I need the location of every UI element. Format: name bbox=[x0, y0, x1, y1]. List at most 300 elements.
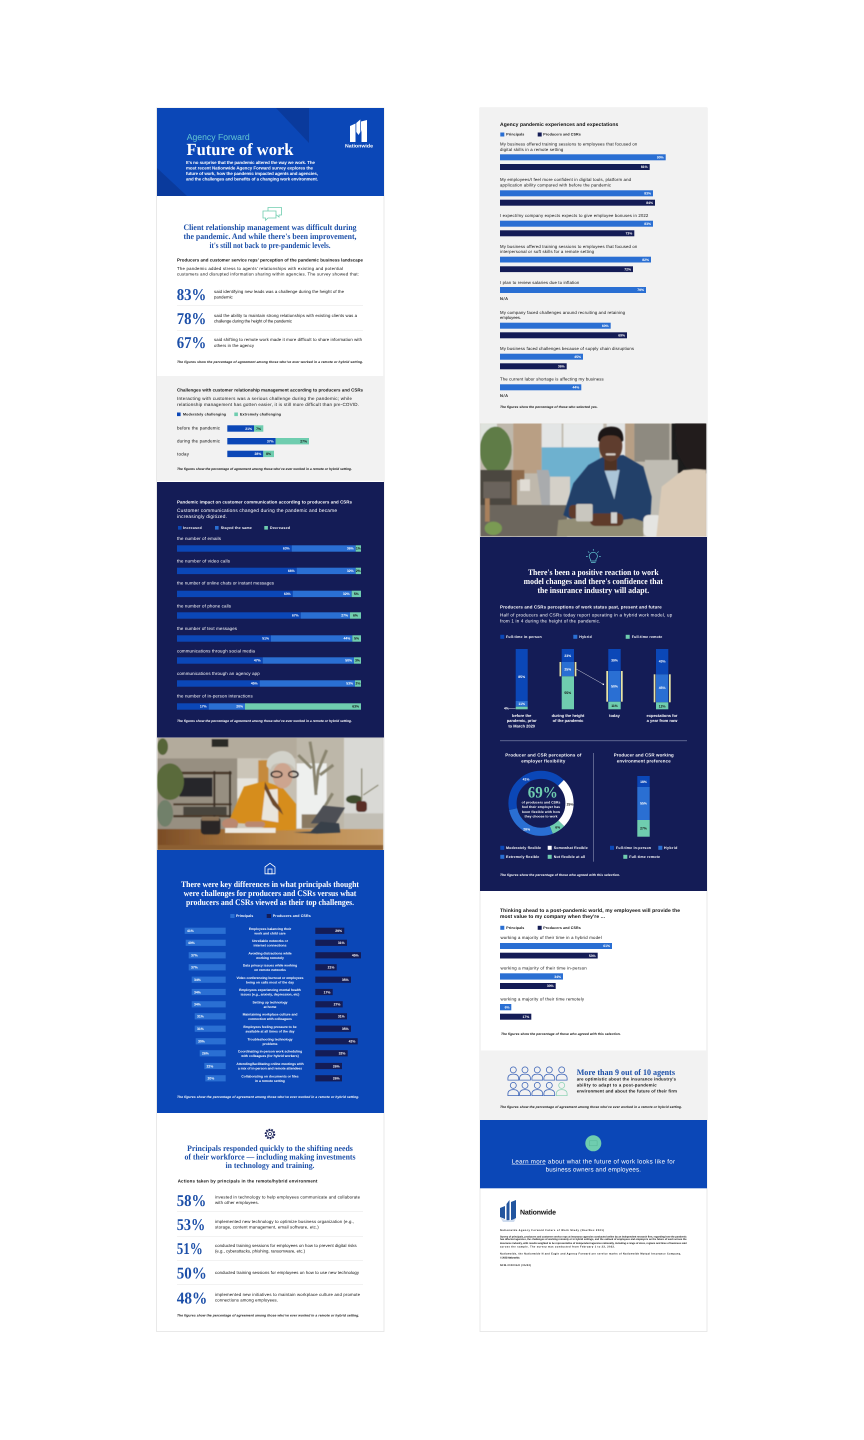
column: before the pandemic: 11% bbox=[518, 702, 525, 706]
heading: the insurance industry will adapt. bbox=[537, 585, 649, 595]
row: being on calls most of the day bbox=[246, 980, 294, 984]
call to action bbox=[512, 1158, 675, 1174]
bar: online chats: 32% bbox=[343, 592, 350, 596]
bar group: training interpersonal: 82% bbox=[642, 258, 649, 262]
column: today: 11% bbox=[611, 704, 618, 708]
subheading: Actions taken by principals in the remote/hybrid environment bbox=[178, 1178, 318, 1184]
bar: today: 28% bbox=[255, 452, 261, 456]
row: 30% bbox=[198, 1040, 205, 1044]
row: 34% bbox=[194, 990, 201, 994]
column: during the height of the pandemic: 25% bbox=[564, 668, 571, 672]
row bbox=[192, 976, 351, 984]
logo: Nationwide: Nationwide bbox=[520, 1208, 556, 1216]
row: in a remote setting bbox=[255, 1079, 285, 1083]
bar group: remotely: 6% bbox=[505, 1006, 510, 1010]
panel: challenges with customer relationship management bbox=[157, 376, 384, 481]
footnote: The figures show the percentage of those who selected yes. bbox=[500, 405, 598, 409]
bar: phone calls: 67% bbox=[292, 614, 299, 618]
row: Avoiding distractions while bbox=[248, 952, 292, 956]
bar: online chats: the number of online chats or instant messages bbox=[177, 580, 275, 586]
logo: Nationwide bbox=[345, 120, 373, 150]
bar group: recruiting: employees. bbox=[500, 315, 521, 320]
bar group: confident digital tools: 83% bbox=[644, 192, 651, 196]
row: 26% bbox=[202, 1052, 209, 1056]
chart: employer flexibility donut: they choose to work bbox=[524, 814, 558, 818]
stat: 50%: conducted training sessions for employees on how to use new technology bbox=[215, 1270, 360, 1275]
stat: 53%: storage, content management, email software, etc.) bbox=[215, 1224, 319, 1230]
row: 34% bbox=[194, 978, 201, 982]
legend: Producers and CSRs bbox=[543, 132, 581, 136]
bar: during the pandemic: 37% bbox=[267, 440, 274, 444]
stat: 50% bbox=[177, 1263, 360, 1282]
footnote: The figures show the percentage of agreement among those who've ever worked in a remote or hybrid setting. bbox=[177, 1313, 359, 1317]
stat: 83%: pandemic bbox=[214, 294, 234, 300]
arrow: hybrid increase bbox=[576, 669, 604, 685]
source notes: Nationwide, the Nationwide N and Eagle and Agency Forward are service marks of Nationwide Mutual Insurance Company, bbox=[500, 1252, 681, 1256]
column: before the pandemic: before the bbox=[512, 713, 532, 718]
legend: Full-time remote bbox=[632, 635, 662, 639]
column: expectations for a year from now: 12% bbox=[659, 704, 665, 708]
heading bbox=[524, 567, 663, 595]
panel: pandemic impact on customer communication bbox=[157, 482, 384, 738]
bar group: in-person bbox=[500, 966, 587, 989]
heading: were challenges for producers and CSRs versus what bbox=[184, 888, 356, 898]
bar group: salaries: 79% bbox=[637, 288, 644, 292]
stat: 48%: implemented new initiatives to maintain workplace culture and promote bbox=[215, 1292, 361, 1297]
heading bbox=[184, 223, 357, 250]
stat: 53%: 53% bbox=[177, 1215, 205, 1234]
row: 26% bbox=[333, 1077, 340, 1081]
body text: Interacting with customers was a serious challenge during the pandemic; while bbox=[177, 396, 352, 401]
heading bbox=[500, 908, 680, 920]
source notes: NFM-00000AO (05/22) bbox=[500, 1264, 531, 1267]
heading: There's been a positive reaction to work bbox=[528, 567, 659, 577]
body text: The pandemic added stress to agents' relationships with existing and potential bbox=[177, 266, 343, 271]
heading: model changes and there's confidence that bbox=[524, 576, 663, 586]
row: connection with colleagues bbox=[248, 1017, 292, 1021]
callout: More than 9 out of 10 agents bbox=[577, 1067, 676, 1077]
row bbox=[189, 952, 361, 960]
chart: employer flexibility donut: 28% bbox=[523, 828, 530, 832]
column: during the height of the pandemic: during the height bbox=[552, 713, 585, 718]
legend bbox=[500, 926, 581, 930]
callout: environment and about the future of their firm bbox=[577, 1089, 677, 1094]
body text: Customer communications changed during the pandemic and became bbox=[177, 508, 337, 514]
footnote: The figures show the percentage of those who agreed with this selection. bbox=[501, 1032, 621, 1036]
heading bbox=[181, 879, 359, 907]
row bbox=[185, 927, 344, 935]
bar group: bonuses: I expect/my company expects expects to give employee bonuses in 2022 bbox=[500, 213, 649, 218]
body text: Half of producers and CSRs today report operating in a hybrid work model, up bbox=[500, 613, 673, 618]
legend: preference: Hybrid bbox=[664, 846, 677, 850]
legend: flexibility: Extremely flexible bbox=[506, 855, 539, 859]
bar: agency app: 45% bbox=[251, 682, 258, 686]
row: Employees experiencing mental health bbox=[239, 988, 301, 992]
bar group: hybrid bbox=[500, 935, 612, 958]
panel: thinking ahead bbox=[500, 908, 680, 1036]
chart: working environment preference: 18% bbox=[640, 780, 647, 784]
stacked bars: work status bbox=[504, 649, 678, 728]
legend: preference bbox=[610, 846, 677, 859]
bar: phone calls: the number of phone calls bbox=[177, 604, 232, 608]
source notes: © 2022 Nationwide. bbox=[500, 1256, 520, 1260]
heading: Pandemic impact on customer communication according to producers and CSRs bbox=[177, 500, 353, 504]
row: at home bbox=[264, 1005, 277, 1009]
column: before the pandemic bbox=[504, 649, 537, 728]
subheading: Producers and customer service reps' perception of the pandemic business landscape bbox=[177, 258, 364, 262]
legend: Producers and CSRs bbox=[273, 914, 311, 918]
footnote: The figures show the percentage of agreement among those who've ever worked in a remote or hybrid setting. bbox=[177, 360, 363, 364]
icon: light bulb bbox=[586, 549, 601, 562]
chart: employer flexibility donut: of producers and CSRs bbox=[522, 800, 560, 804]
stat: 51%: (e.g., cyberattacks, phishing, ransomware, etc.) bbox=[215, 1248, 306, 1254]
body text bbox=[177, 266, 359, 277]
panel: 9 out of 10 agents bbox=[480, 1050, 707, 1120]
bar: in-person interactions: 17% bbox=[200, 705, 207, 709]
bar: emails: 1% bbox=[356, 547, 361, 551]
legend bbox=[178, 526, 290, 530]
stat: 83%: said identifying new leads was a challenge during the height of the bbox=[214, 289, 345, 294]
bar: today: 8% bbox=[266, 452, 271, 456]
heading: producers and CSRs viewed as their top challenges. bbox=[186, 897, 354, 907]
row bbox=[192, 988, 333, 997]
source notes: across the sample. The survey was conducted from February 1 to 23, 2022. bbox=[500, 1246, 615, 1248]
heading: Thinking ahead to a post-pandemic world, my employees will provide the bbox=[500, 908, 680, 914]
bar: online chats bbox=[177, 580, 361, 597]
bar: video calls: 32% bbox=[347, 569, 354, 573]
heading: in technology and training. bbox=[226, 1161, 314, 1170]
bar: agency app bbox=[177, 671, 361, 687]
legend: flexibility bbox=[500, 846, 588, 859]
legend: preference: Full-time remote bbox=[629, 855, 660, 859]
stat: 53%: implemented new technology to optimize business organization (e.g., bbox=[215, 1219, 354, 1224]
footnote: The figures show the percentage of agreement among those who've ever worked in a remote or hybrid setting. bbox=[177, 467, 352, 471]
panel: footer bbox=[500, 1200, 687, 1267]
bar group: salaries: I plan to review salaries due to inflation bbox=[500, 280, 580, 285]
legend: flexibility: Moderately flexible bbox=[506, 846, 541, 850]
row: 31% bbox=[338, 941, 345, 945]
row bbox=[195, 1025, 351, 1033]
bar group: confident digital tools: application ability compared with before the pandemic bbox=[500, 182, 612, 188]
heading: of their workforce — including making investments bbox=[184, 1152, 356, 1162]
panel: key differences bbox=[157, 850, 384, 1113]
bar: in-person interactions: 20% bbox=[236, 705, 243, 709]
legend bbox=[177, 412, 281, 417]
legend: Stayed the same bbox=[221, 526, 252, 530]
body text: increasingly digitized. bbox=[177, 514, 227, 520]
bar: video calls: 2% bbox=[356, 569, 361, 573]
legend: Increased bbox=[183, 526, 202, 530]
title: Future of work bbox=[186, 140, 294, 159]
bar: text messages: 44% bbox=[344, 637, 350, 641]
chart: working environment preference: 27% bbox=[640, 826, 647, 830]
callout: ability to adapt to a post-pandemic bbox=[577, 1083, 657, 1088]
heading bbox=[184, 1144, 356, 1170]
bar group: hybrid: 61% bbox=[603, 944, 610, 948]
chart: working environment preference bbox=[614, 752, 674, 837]
panel: header bbox=[157, 108, 384, 196]
panel: positive reaction to work model changes bbox=[480, 537, 707, 891]
column: before the pandemic: to March 2020 bbox=[508, 724, 536, 728]
row: 35% bbox=[342, 978, 349, 982]
body text: from 1 in 4 during the height of the pandemic. bbox=[500, 619, 600, 624]
bar group: remotely: working a majority of their time remotely bbox=[500, 996, 585, 1002]
stat: 83% bbox=[177, 285, 345, 304]
bar: agency app: 53% bbox=[346, 682, 353, 686]
row: 41% bbox=[187, 929, 194, 933]
heading: it's still not back to pre-pandemic levels. bbox=[210, 241, 330, 250]
stat: 51%: 51% bbox=[177, 1239, 203, 1258]
row: 37% bbox=[191, 966, 198, 970]
bar group: confident digital tools: My employees/I feel more confident in digital tools, platform and bbox=[500, 177, 632, 182]
bar group: training digital bbox=[500, 142, 666, 170]
row: Coordinating in-person work scheduling bbox=[238, 1050, 302, 1054]
bar: online chats: 63% bbox=[284, 592, 291, 596]
bar: emails: the number of emails bbox=[177, 536, 222, 541]
call to action: business owners and employees. bbox=[546, 1166, 641, 1174]
footnote: The figures show the percentage of those who agreed with this selection. bbox=[500, 873, 620, 877]
bar group: labor shortage: N/A bbox=[500, 393, 508, 398]
footnote: The figures show the percentage of agreement among those who've ever worked in a remote or hybrid setting. bbox=[500, 1105, 682, 1109]
heading: Client relationship management was difficult during bbox=[184, 223, 357, 232]
row: 37% bbox=[191, 954, 198, 958]
column: expectations for a year from now: a year from now bbox=[647, 718, 678, 723]
row: internet connections bbox=[254, 943, 287, 947]
column: expectations for a year from now bbox=[647, 649, 678, 723]
bar: during the pandemic: 27% bbox=[300, 440, 307, 444]
column: today: 39% bbox=[611, 658, 618, 662]
bar: during the pandemic bbox=[177, 438, 309, 444]
body text bbox=[177, 396, 359, 407]
bar: social media: communications through social media bbox=[177, 648, 256, 654]
chart: working environment preference: Producer and CSR working bbox=[614, 752, 674, 758]
legend: Decreased bbox=[270, 526, 290, 530]
row: Employees feeling pressure to be bbox=[243, 1025, 297, 1029]
chart: employer flexibility donut: Producer and CSR perceptions of bbox=[505, 752, 582, 758]
callout bbox=[577, 1067, 677, 1094]
legend bbox=[500, 132, 581, 136]
legend: Principals bbox=[506, 132, 524, 136]
chart: employer flexibility donut: 6% bbox=[555, 826, 560, 830]
stat: 51% bbox=[177, 1239, 357, 1258]
heading: most value to my company when they're ... bbox=[500, 914, 606, 920]
chart: working environment preference: 55% bbox=[640, 802, 647, 806]
stat: 58%: with other employees. bbox=[215, 1200, 259, 1205]
legend: Principals bbox=[506, 926, 524, 930]
bar group: confident digital tools: 84% bbox=[646, 201, 653, 205]
row bbox=[186, 939, 347, 947]
bar: emails: 63% bbox=[283, 547, 290, 551]
bar: phone calls bbox=[177, 604, 361, 619]
column: during the height of the pandemic bbox=[552, 649, 585, 723]
legend: Producers and CSRs bbox=[543, 926, 581, 930]
intro text: most recent Nationwide Agency Forward survey explores the bbox=[186, 166, 314, 171]
call to action: Learn more about what the future of work looks like for bbox=[512, 1158, 675, 1166]
bar: before the pandemic: 21% bbox=[245, 427, 252, 431]
subheading: Producers and CSRs perceptions of work status past, present and future bbox=[500, 604, 662, 610]
row: issues (e.g., anxiety, depression, etc) bbox=[241, 993, 299, 997]
row: Troubleshooting technology bbox=[248, 1038, 293, 1042]
row: 42% bbox=[349, 1040, 355, 1044]
stat: 51%: conducted training sessions for employees on how to prevent digital risks bbox=[215, 1243, 357, 1248]
bar group: recruiting: 60% bbox=[602, 324, 609, 328]
row: Video conferencing burnout or employees bbox=[236, 976, 304, 980]
icon: chat bubbles bbox=[263, 208, 282, 220]
column: before the pandemic: 4% bbox=[504, 706, 509, 710]
stat: 78% bbox=[177, 309, 358, 328]
stat: 48%: connections among employees. bbox=[215, 1298, 278, 1302]
column: before the pandemic: 85% bbox=[518, 675, 525, 679]
legend: Full-time in-person bbox=[506, 635, 542, 639]
row: 29% bbox=[335, 929, 342, 933]
column: before the pandemic: pandemic, prior bbox=[507, 718, 537, 723]
row: Employees balancing their bbox=[249, 927, 292, 931]
body text: relationship management has gotten easier, it is still more difficult than pre-COVID. bbox=[177, 402, 359, 407]
bar: text messages: 51% bbox=[262, 637, 269, 641]
bar: social media: 47% bbox=[254, 659, 261, 663]
row: 31% bbox=[197, 1015, 204, 1019]
row: 20% bbox=[208, 1077, 214, 1081]
bar: social media: 3% bbox=[355, 659, 360, 663]
bar: emails: 36% bbox=[347, 547, 354, 551]
row: 21% bbox=[328, 966, 334, 970]
stat: 58%: 58% bbox=[177, 1191, 206, 1210]
row bbox=[200, 1050, 348, 1058]
legend: Principals bbox=[236, 914, 253, 918]
bar group: training interpersonal: 72% bbox=[624, 267, 631, 271]
bar: during the pandemic: during the pandemic bbox=[177, 438, 221, 444]
bar group: recruiting: My company faced challenges around recruiting and retaining bbox=[500, 310, 626, 315]
bar group: salaries bbox=[500, 280, 646, 301]
bar: text messages bbox=[177, 626, 361, 642]
row: Data privacy issues while working bbox=[243, 964, 297, 968]
photo: woman working at a table with tablet bbox=[156, 738, 383, 850]
bar group: confident digital tools bbox=[500, 177, 655, 206]
row: 22% bbox=[206, 1064, 213, 1068]
stat: 67% bbox=[177, 333, 363, 352]
intro text: It's no surprise that the pandemic altered the way we work. The bbox=[186, 160, 316, 165]
chart: working environment preference: environment preference bbox=[617, 758, 671, 764]
bar group: labor shortage: The current labor shortage is affecting my business bbox=[500, 376, 604, 382]
row: Unreliable networks or bbox=[252, 939, 289, 943]
legend bbox=[230, 914, 311, 918]
bar: in-person interactions: 63% bbox=[352, 705, 359, 709]
bar group: salaries: N/A bbox=[500, 296, 508, 301]
row: Maintaining workplace culture and bbox=[243, 1012, 297, 1016]
bar: emails bbox=[177, 536, 361, 552]
panel: principals responded bbox=[177, 1130, 363, 1317]
stat: 48%: 48% bbox=[177, 1288, 207, 1307]
callout: are optimistic about the insurance industry's bbox=[577, 1077, 677, 1082]
bar: today bbox=[177, 451, 274, 457]
row: Collaborating on documents or files bbox=[241, 1074, 299, 1078]
row: 17% bbox=[324, 990, 330, 994]
column: during the height of the pandemic: 55% bbox=[564, 691, 571, 695]
stat: 67%: others in the agency bbox=[214, 343, 255, 348]
legend: flexibility: Somewhat flexible bbox=[554, 846, 588, 850]
row: 45% bbox=[352, 954, 359, 958]
bar: video calls bbox=[177, 558, 361, 574]
bar group: training digital: 81% bbox=[641, 165, 648, 169]
column: today: today bbox=[609, 713, 621, 718]
row: working remotely bbox=[255, 956, 284, 960]
chart: employer flexibility donut: 41% bbox=[523, 778, 529, 782]
bar group: supply chain: My business faced challenges because of supply chain disruptions bbox=[500, 346, 634, 351]
bar group: remotely: 17% bbox=[523, 1015, 529, 1019]
bar group: in-person: working a majority of their time in-person bbox=[500, 966, 587, 970]
legend: Extremely challenging bbox=[240, 413, 281, 417]
chart: employer flexibility donut bbox=[505, 752, 582, 832]
row bbox=[204, 1062, 342, 1071]
legend: flexibility: Not flexible at all bbox=[554, 855, 585, 859]
bar: online chats: 5% bbox=[354, 592, 359, 596]
bar group: labor shortage: 44% bbox=[573, 386, 579, 390]
row: 31% bbox=[197, 1027, 204, 1031]
heading: the pandemic. And while there's been improvement, bbox=[184, 232, 356, 241]
stat: 78%: said the ability to maintain strong relationships with existing clients was a bbox=[214, 313, 358, 318]
bar: today: today bbox=[177, 452, 190, 457]
row: 31% bbox=[338, 1015, 345, 1019]
bar: in-person interactions: the number of in-person interactions bbox=[177, 694, 253, 698]
series name: Agency Forward bbox=[187, 132, 250, 142]
footnote: The figures show the percentage of agreement among those who've ever worked in a remote or hybrid setting. bbox=[177, 719, 352, 723]
bar: agency app: communications through an agency app bbox=[177, 671, 260, 676]
bar group: training interpersonal: My business offered training sessions to employees that focused on bbox=[500, 244, 638, 249]
row: on remote networks bbox=[254, 968, 286, 972]
bar group: in-person: 30% bbox=[547, 984, 554, 988]
source notes: Nationwide Agency Forward Future of Work Study (Nov/Dec 2021) bbox=[500, 1229, 604, 1232]
panel: learn more bbox=[480, 1120, 707, 1188]
bar group: training digital: 90% bbox=[657, 156, 664, 160]
row: Setting up technology bbox=[252, 1000, 288, 1004]
bar: video calls: 66% bbox=[288, 569, 295, 573]
stat: 48% bbox=[177, 1288, 361, 1307]
bar group: remotely bbox=[500, 996, 585, 1020]
source notes: insurance industry, with results weighted to be representative of independent agencies nationally, including a range of sizes, regions and lines of business sold bbox=[500, 1242, 687, 1245]
column: expectations for a year from now: 43% bbox=[659, 660, 665, 664]
row: a mix of in-person and remote attendees bbox=[238, 1067, 302, 1071]
bar: text messages: 5% bbox=[354, 637, 359, 641]
heading: Principals responded quickly to the shifting needs bbox=[187, 1144, 354, 1153]
bar group: bonuses: 83% bbox=[644, 222, 651, 226]
row: 40% bbox=[188, 941, 195, 945]
heading: Challenges with customer relationship management according to producers and CSRs bbox=[177, 388, 364, 392]
source notes: has affected agencies, the challenges of working remotely or in hybrid settings, and the outlook of employees and employers on the future of work across the bbox=[500, 1238, 687, 1241]
bar group: hybrid: 53% bbox=[589, 954, 596, 958]
logo: Nationwide: Nationwide bbox=[345, 144, 373, 150]
bar: video calls: the number of video calls bbox=[177, 558, 231, 564]
icon: house bbox=[265, 863, 275, 874]
bar group: training interpersonal: interpersonal or soft skills for a remote setting bbox=[500, 249, 595, 254]
row bbox=[195, 1012, 347, 1021]
source notes bbox=[500, 1229, 687, 1267]
bar group: supply chain bbox=[500, 346, 634, 369]
logo: Nationwide bbox=[500, 1200, 556, 1222]
icon: green circle bbox=[585, 1135, 601, 1151]
icon: people bbox=[508, 1067, 567, 1096]
stat: 50%: 50% bbox=[177, 1263, 207, 1282]
column: during the height of the pandemic: 23% bbox=[564, 654, 571, 658]
row: with colleagues (for hybrid workers) bbox=[240, 1054, 299, 1058]
stat: 58%: invested in technology to help employees communicate and collaborate bbox=[215, 1194, 361, 1200]
heading: Agency pandemic experiences and expectations bbox=[500, 122, 619, 128]
source notes: Survey of principals, producers and customer service reps at insurance agencies conducted online by an independent research firm, regarding how the pandemic bbox=[500, 1235, 687, 1238]
bar group: labor shortage bbox=[500, 376, 604, 398]
chart: employer flexibility donut: been flexible with how bbox=[522, 810, 560, 814]
column: today bbox=[606, 649, 623, 718]
bar group: in-person: 34% bbox=[554, 975, 561, 979]
body text: customers and disrupted information sharing within agencies. The survey showed that: bbox=[177, 272, 359, 277]
